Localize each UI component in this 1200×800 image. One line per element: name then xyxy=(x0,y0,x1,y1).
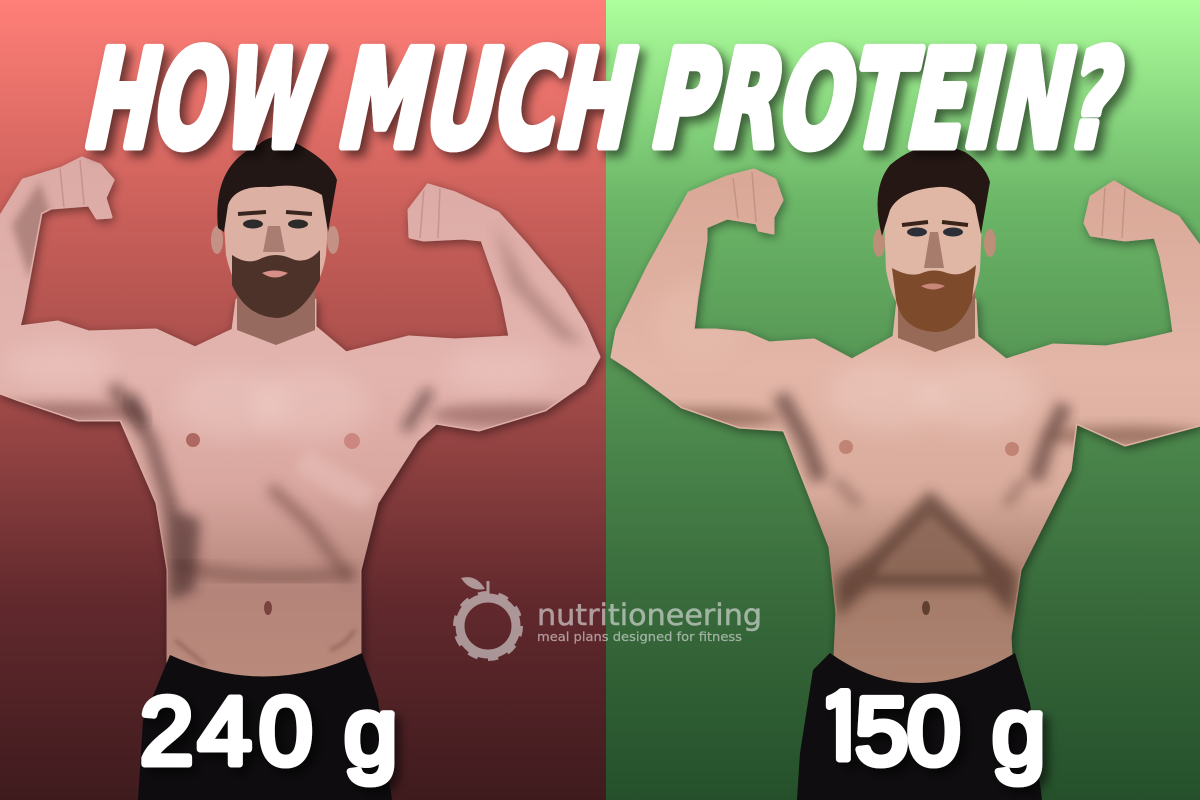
left body shading xyxy=(0,160,590,665)
label: 150 g: 50g xyxy=(855,678,1045,785)
right pants xyxy=(797,653,1042,800)
right body xyxy=(612,170,1200,700)
title: MUCH xyxy=(337,21,641,178)
figure: man on 240 g protein xyxy=(0,137,599,800)
title: HOW xyxy=(83,21,329,178)
figure: man on 150 g protein xyxy=(612,146,1200,800)
left head xyxy=(211,137,339,345)
right body shading xyxy=(620,172,1200,617)
tagline: meal plans designed for fitness xyxy=(537,630,742,644)
label: 150 g: 1 xyxy=(818,680,866,776)
label: 240 g: 240g xyxy=(140,678,397,785)
brand name: nutritioneering xyxy=(537,598,762,632)
panel: green background xyxy=(606,0,1200,800)
right head xyxy=(873,146,996,352)
panel: red background xyxy=(0,0,606,800)
left body xyxy=(0,158,599,700)
left pants xyxy=(138,653,392,800)
icon: apple gear xyxy=(456,577,520,658)
logo: nutritioneering xyxy=(456,577,762,658)
title xyxy=(83,21,1128,178)
